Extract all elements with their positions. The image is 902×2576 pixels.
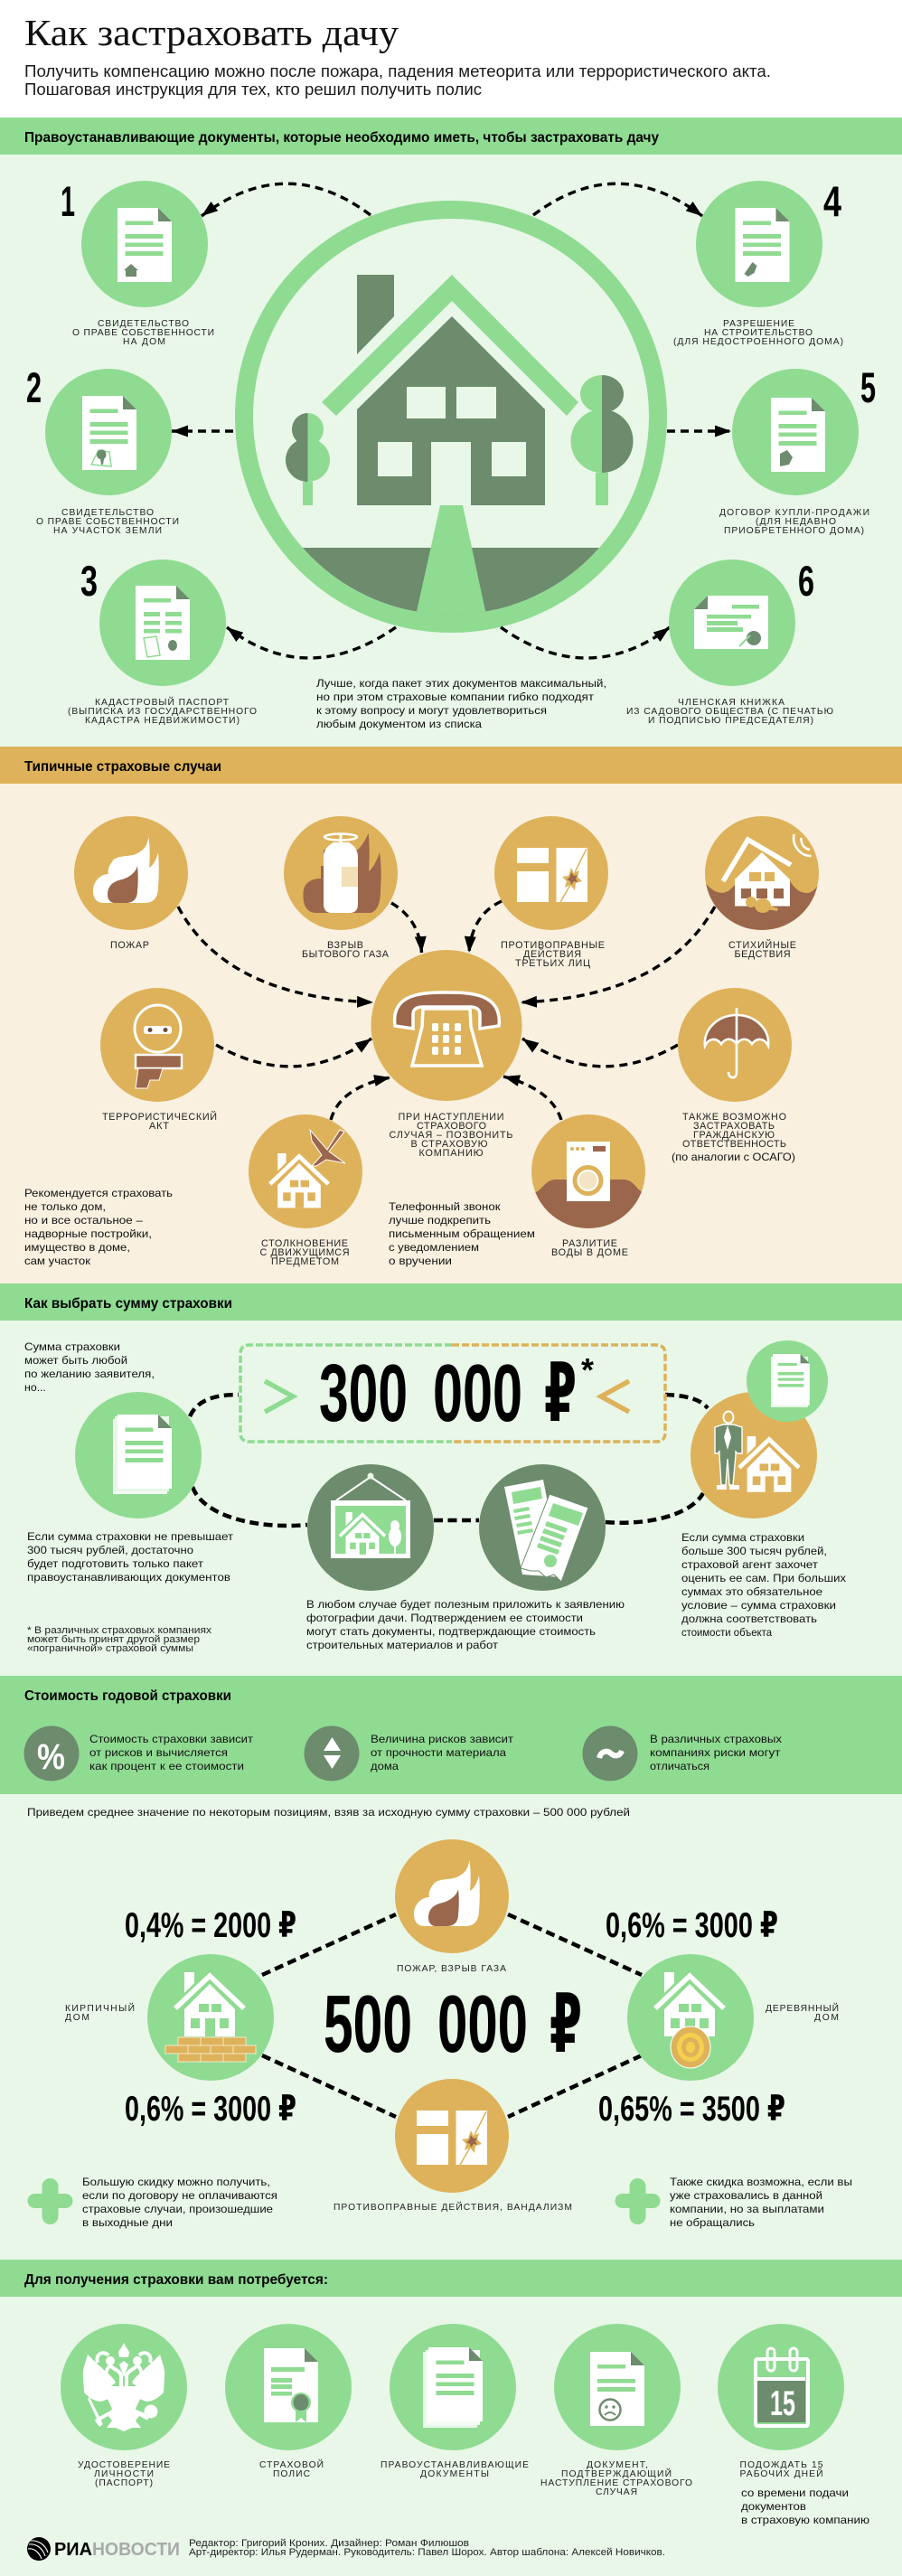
discount 1: страховые случаи, произошедшие — [82, 2203, 273, 2215]
subtitle — [24, 62, 771, 99]
case: water leak — [529, 1114, 651, 1258]
house: wooden: ДЕРЕВЯННЫЙ — [766, 2002, 839, 2014]
section header: choosing sum — [0, 1283, 902, 1321]
text: photos and documents — [306, 1598, 625, 1651]
item: wait 15 days: со времени подачи — [741, 2487, 849, 2499]
item: passport — [61, 2324, 187, 2488]
threshold box 300 000 — [240, 1345, 665, 1442]
rates: 0,6% = 3000 ₽ — [125, 2090, 296, 2129]
case: terrorist act: ТЕРРОРИСТИЧЕСКИЙ — [102, 1111, 217, 1123]
connecting dashed lines — [190, 1395, 708, 1526]
center: call the insurer: КОМПАНИЮ — [419, 1148, 484, 1159]
document 3: КАДАСТРОВЫЙ ПАСПОРТ — [95, 696, 230, 708]
threshold box 300 000: ₽ — [544, 1349, 577, 1439]
item: policy: ПОЛИС — [273, 2469, 311, 2479]
logo: RIA Novosti: РИА — [54, 2540, 92, 2560]
house: brick: ДОМ — [65, 2013, 89, 2023]
icon: receipts — [479, 1464, 606, 1591]
risk: fire and gas — [395, 1839, 509, 1974]
document 4: НА СТРОИТЕЛЬСТВО — [704, 328, 813, 338]
document 3: (ВЫПИСКА ИЗ ГОСУДАРСТВЕННОГО — [68, 707, 257, 717]
note: sum is free: но... — [24, 1381, 46, 1394]
footnote: может быть принят другой размер — [27, 1634, 200, 1645]
tilde item: В различных страховых — [650, 1733, 782, 1745]
up-down item: от прочности материала — [371, 1746, 506, 1759]
note: what to insure: не только дом, — [24, 1200, 106, 1213]
document 6 — [626, 557, 833, 726]
document 1: СВИДЕТЕЛЬСТВО — [98, 319, 189, 329]
center: call the insurer: СЛУЧАЯ – ПОЗВОНИТЬ — [389, 1130, 513, 1141]
footnote: «пограничной» страховой суммы — [27, 1643, 193, 1654]
central amount 500 000: 000 — [437, 1979, 528, 2070]
case: natural disaster: СТИХИЙНЫЕ — [728, 939, 796, 951]
text: over threshold: Если сумма страховки — [681, 1531, 804, 1544]
document 5: 5 — [860, 363, 876, 411]
threshold box 300 000: 300 — [319, 1349, 408, 1439]
document 3: 3 — [80, 557, 98, 605]
document 4: РАЗРЕШЕНИЕ — [723, 319, 794, 329]
rates: 0,65% = 3500 ₽ — [598, 2090, 785, 2129]
document 1: НА ДОМ — [123, 337, 165, 347]
case: collision with moving object: СТОЛКНОВЕНИЕ — [261, 1238, 348, 1249]
center: call the insurer — [371, 950, 522, 1159]
case: collision with moving object: С ДВИЖУЩИМСЯ — [260, 1247, 349, 1258]
document 6: 6 — [798, 557, 814, 605]
case: third-party actions — [494, 816, 608, 969]
discount 1: если по договору не оплачиваются — [82, 2189, 277, 2202]
discount 2: не обращались — [670, 2216, 755, 2229]
note: what to insure: сам участок — [24, 1255, 91, 1267]
icon: house photo — [307, 1464, 434, 1591]
item: incident document: НАСТУПЛЕНИЕ СТРАХОВОГО — [540, 2478, 692, 2488]
note: phone call: Телефонный звонок — [389, 1200, 501, 1213]
center: call the insurer: СТРАХОВОГО — [417, 1121, 486, 1132]
center: call the insurer: В СТРАХОВУЮ — [410, 1139, 488, 1150]
rates: 0,6% = 3000 ₽ — [606, 1906, 778, 1945]
note on document package: к этому вопросу и могут удовлетвориться — [316, 704, 547, 717]
text: under threshold — [27, 1530, 234, 1584]
central amount 500 000 — [324, 1979, 582, 2070]
case: civil liability umbrella: ГРАЖДАНСКУЮ — [693, 1130, 775, 1141]
icon: appraiser and house — [691, 1392, 817, 1518]
case: civil liability umbrella — [672, 988, 795, 1163]
item: passport: ЛИЧНОСТИ — [94, 2469, 154, 2479]
panel: insurance cases background — [0, 784, 902, 1283]
document 2: СВИДЕТЕЛЬСТВО — [61, 508, 154, 518]
section header: choosing sum: Как выбрать сумму страховки — [24, 1296, 232, 1312]
note: what to insure: Рекомендуется страховать — [24, 1187, 173, 1199]
document 6: И ПОДПИСЬЮ ПРЕДСЕДАТЕЛЯ) — [648, 716, 813, 726]
text: under threshold: будет подготовить только пакет — [27, 1557, 204, 1570]
item: passport: УДОСТОВЕРЕНИЕ — [78, 2460, 170, 2470]
percent item: от рисков и вычисляется — [89, 1746, 228, 1759]
document 1: 1 — [61, 177, 75, 225]
note on document package: Лучше, когда пакет этих документов максимальный, — [316, 677, 606, 690]
note: phone call: лучше подкрепить — [389, 1214, 491, 1227]
diamond dashed lines — [262, 1914, 642, 2117]
item: passport: (ПАСПОРТ) — [95, 2478, 153, 2488]
document 2: 2 — [26, 363, 42, 411]
item: wait 15 days: документов — [741, 2500, 806, 2513]
note: what to insure: но и все остальное – — [24, 1214, 143, 1227]
text: under threshold: Если сумма страховки не превышает — [27, 1530, 234, 1543]
document 2 — [26, 363, 179, 536]
text: over threshold — [681, 1531, 846, 1639]
tilde item: компаниях риски могут — [650, 1746, 781, 1759]
arrows from house to documents — [172, 183, 731, 658]
text: photos and documents: строительных материалов и работ — [306, 1639, 499, 1651]
discount 1 — [27, 2176, 277, 2229]
document 5: ДОГОВОР КУПЛИ-ПРОДАЖИ — [719, 508, 869, 518]
case: civil liability umbrella: (по аналогии с ОСАГО) — [672, 1151, 795, 1163]
item: wait 15 days: ПОДОЖДАТЬ 15 — [739, 2460, 823, 2470]
case: natural disaster: БЕДСТВИЯ — [734, 949, 790, 960]
section header: insurance cases — [0, 747, 902, 784]
item: incident document: ПОДТВЕРЖДАЮЩИЙ — [561, 2468, 672, 2479]
case: natural disaster — [700, 816, 823, 960]
percent item — [23, 1726, 254, 1781]
section header: insurance cases: Типичные страховые случаи — [24, 759, 221, 775]
text: over threshold: больше 300 тысяч рублей, — [681, 1545, 827, 1557]
document 1 — [61, 177, 214, 347]
house: wooden: ДОМ — [814, 2013, 839, 2023]
text: over threshold: должна соответствовать — [681, 1612, 817, 1625]
credits — [189, 2538, 665, 2558]
case: terrorist act — [100, 988, 217, 1132]
risk: unlawful acts: ПРОТИВОПРАВНЫЕ ДЕЙСТВИЯ, ВАНДАЛИЗМ — [334, 2201, 572, 2213]
case: third-party actions: ПРОТИВОПРАВНЫЕ — [501, 940, 605, 951]
rates — [125, 1906, 785, 2129]
case: third-party actions: ТРЕТЬИХ ЛИЦ — [515, 958, 590, 969]
risk: fire and gas: ПОЖАР, ВЗРЫВ ГАЗА — [397, 1964, 506, 1974]
case: gas explosion: БЫТОВОГО ГАЗА — [302, 949, 390, 960]
case: civil liability umbrella: ОТВЕТСТВЕННОСТЬ — [682, 1139, 786, 1150]
item: policy — [225, 2324, 352, 2479]
note on document package: но при этом страховые компании гибко подходят — [316, 691, 595, 703]
case: gas explosion: ВЗРЫВ — [327, 940, 363, 951]
subtitle: Получить компенсацию можно после пожара, падения метеорита или террористического акта. — [24, 62, 771, 80]
note: sum is free: Сумма страховки — [24, 1340, 120, 1353]
logo: RIA Novosti: НОВОСТИ — [92, 2540, 180, 2560]
item: wait 15 days — [718, 2324, 869, 2526]
icon: small document circle — [747, 1340, 828, 1422]
note: sum is free: по желанию заявителя, — [24, 1368, 155, 1380]
rates: 0,4% = 2000 ₽ — [125, 1906, 296, 1945]
discount 2: уже страховались в данной — [670, 2189, 822, 2202]
text: under threshold: 300 тысяч рублей, достаточно — [27, 1544, 193, 1556]
panel: annual cost — [0, 1676, 902, 1794]
case: collision with moving object — [249, 1114, 362, 1267]
discount 1: в выходные дни — [82, 2216, 173, 2229]
up-down item — [304, 1726, 514, 1781]
threshold box 300 000: 000 — [433, 1349, 522, 1439]
note: phone call: с уведомлением — [389, 1241, 479, 1254]
note: what to insure: надворные постройки, — [24, 1227, 152, 1240]
document 5: (ДЛЯ НЕДАВНО — [756, 517, 836, 527]
item: wait 15 days: 15 — [770, 2384, 795, 2423]
discount 1: Большую скидку можно получить, — [82, 2176, 270, 2188]
section header: what you need — [0, 2260, 902, 2297]
percent item: как процент к ее стоимости — [89, 1760, 244, 1772]
percent item: Стоимость страховки зависит — [89, 1733, 254, 1745]
case: civil liability umbrella: ТАКЖЕ ВОЗМОЖНО — [682, 1112, 786, 1123]
note: sum is free: может быть любой — [24, 1354, 127, 1367]
document 3 — [68, 557, 257, 726]
up-down item: дома — [371, 1760, 399, 1772]
case: water leak: РАЗЛИТИЕ — [562, 1238, 617, 1249]
subtitle: Пошаговая инструкция для тех, кто решил получить полис — [24, 80, 482, 99]
note: sum is free — [24, 1340, 155, 1394]
central amount 500 000: ₽ — [550, 1979, 582, 2070]
document 6: ЧЛЕНСКАЯ КНИЖКА — [678, 698, 785, 708]
center: call the insurer: ПРИ НАСТУПЛЕНИИ — [398, 1112, 504, 1123]
item: incident document: СЛУЧАЯ — [596, 2487, 637, 2497]
item: incident document — [540, 2324, 692, 2497]
text: over threshold: условие – сумма страховки — [681, 1599, 836, 1612]
note: what to insure — [24, 1187, 173, 1267]
item: title documents — [381, 2324, 529, 2479]
item: wait 15 days: в страховую компанию — [741, 2514, 869, 2526]
document 1: О ПРАВЕ СОБСТВЕННОСТИ — [72, 328, 214, 338]
house: brick: КИРПИЧНЫЙ — [65, 2002, 135, 2014]
document 5 — [719, 363, 876, 536]
case: gas explosion — [284, 816, 398, 960]
section header: documents — [0, 118, 902, 155]
discount 2: Также скидка возможна, если вы — [670, 2176, 852, 2188]
title: Как застраховать дачу — [24, 12, 399, 53]
section header: what you need: Для получения страховки вам потребуется: — [24, 2272, 328, 2288]
footnote: * В различных страховых компаниях — [27, 1625, 212, 1636]
document 5: ПРИОБРЕТЕННОГО ДОМА) — [724, 526, 864, 536]
note: phone call: о вручении — [389, 1255, 452, 1267]
credits: Редактор: Григорий Кроних. Дизайнер: Роман Филюшов — [189, 2538, 469, 2549]
case: terrorist act: АКТ — [149, 1121, 169, 1132]
arrows to phone — [178, 901, 715, 1120]
note: what to insure: имущество в доме, — [24, 1241, 130, 1254]
item: title documents: ПРАВОУСТАНАВЛИВАЮЩИЕ — [381, 2460, 529, 2470]
document 4: 4 — [823, 177, 841, 225]
logo: RIA Novosti — [27, 2537, 180, 2561]
house: wooden — [627, 1954, 839, 2081]
icon: documents circle — [75, 1392, 202, 1518]
note: phone call: письменным обращением — [389, 1227, 535, 1240]
text: over threshold: страховой агент захочет — [681, 1558, 819, 1571]
section header: documents: Правоустанавливающие документы, которые необходимо иметь, чтобы застраховать дачу — [24, 130, 659, 146]
discount 2: компании, но за выплатами — [670, 2203, 824, 2215]
panel: annual cost: Стоимость годовой страховки — [24, 1688, 231, 1704]
item: title documents: ДОКУМЕНТЫ — [420, 2469, 489, 2479]
footnote — [27, 1625, 212, 1654]
text: photos and documents: фотографии дачи. Подтверждением ее стоимости — [306, 1612, 583, 1624]
intro line: Приведем среднее значение по некоторым позициям, взяв за исходную сумму страховки – 500 000 рублей — [27, 1806, 630, 1819]
central amount 500 000: 500 — [324, 1979, 412, 2070]
risk: unlawful acts — [334, 2079, 572, 2213]
document 6: ИЗ САДОВОГО ОБЩЕСТВА (С ПЕЧАТЬЮ — [626, 707, 833, 717]
case: water leak: ВОДЫ В ДОМЕ — [551, 1247, 628, 1258]
item: wait 15 days: РАБОЧИХ ДНЕЙ — [739, 2468, 822, 2479]
document 2: НА УЧАСТОК ЗЕМЛИ — [53, 526, 162, 536]
document 2: О ПРАВЕ СОБСТВЕННОСТИ — [36, 517, 179, 527]
case: third-party actions: ДЕЙСТВИЯ — [523, 948, 581, 960]
discount 2 — [615, 2176, 852, 2229]
item: incident document: ДОКУМЕНТ, — [587, 2460, 648, 2470]
house: brick — [65, 1954, 274, 2081]
text: over threshold: суммах это обязательное — [681, 1585, 822, 1598]
case: civil liability umbrella: ЗАСТРАХОВАТЬ — [693, 1121, 775, 1132]
note on document package: любым документом из списка — [316, 718, 482, 730]
document 4: (ДЛЯ НЕДОСТРОЕННОГО ДОМА) — [673, 337, 843, 347]
tilde item: отличаться — [650, 1760, 709, 1772]
credits: Арт-директор: Илья Рудерман. Руководитель: Павел Шорох. Автор шаблона: Алексей Новичков. — [189, 2547, 665, 2558]
threshold box 300 000: * — [581, 1351, 594, 1388]
note on document package — [316, 677, 606, 730]
tilde item — [582, 1726, 782, 1781]
central house illustration — [235, 210, 669, 638]
item: policy: СТРАХОВОЙ — [259, 2458, 324, 2470]
text: under threshold: правоустанавливающих документов — [27, 1571, 230, 1584]
percent item: % — [37, 1737, 65, 1777]
note: phone call — [389, 1200, 535, 1267]
case: fire: ПОЖАР — [110, 940, 149, 951]
text: over threshold: оценить ее сам. При больших — [681, 1572, 846, 1584]
case: fire — [74, 816, 188, 951]
document 4 — [673, 177, 843, 347]
text: photos and documents: могут стать документы, подтверждающие стоимость — [306, 1625, 596, 1638]
document 3: КАДАСТРА НЕДВИЖИМОСТИ) — [85, 716, 240, 726]
text: over threshold: стоимости объекта — [681, 1626, 772, 1639]
up-down item: Величина рисков зависит — [371, 1733, 514, 1745]
text: photos and documents: В любом случае будет полезным приложить к заявлению — [306, 1598, 625, 1611]
case: collision with moving object: ПРЕДМЕТОМ — [271, 1256, 339, 1267]
